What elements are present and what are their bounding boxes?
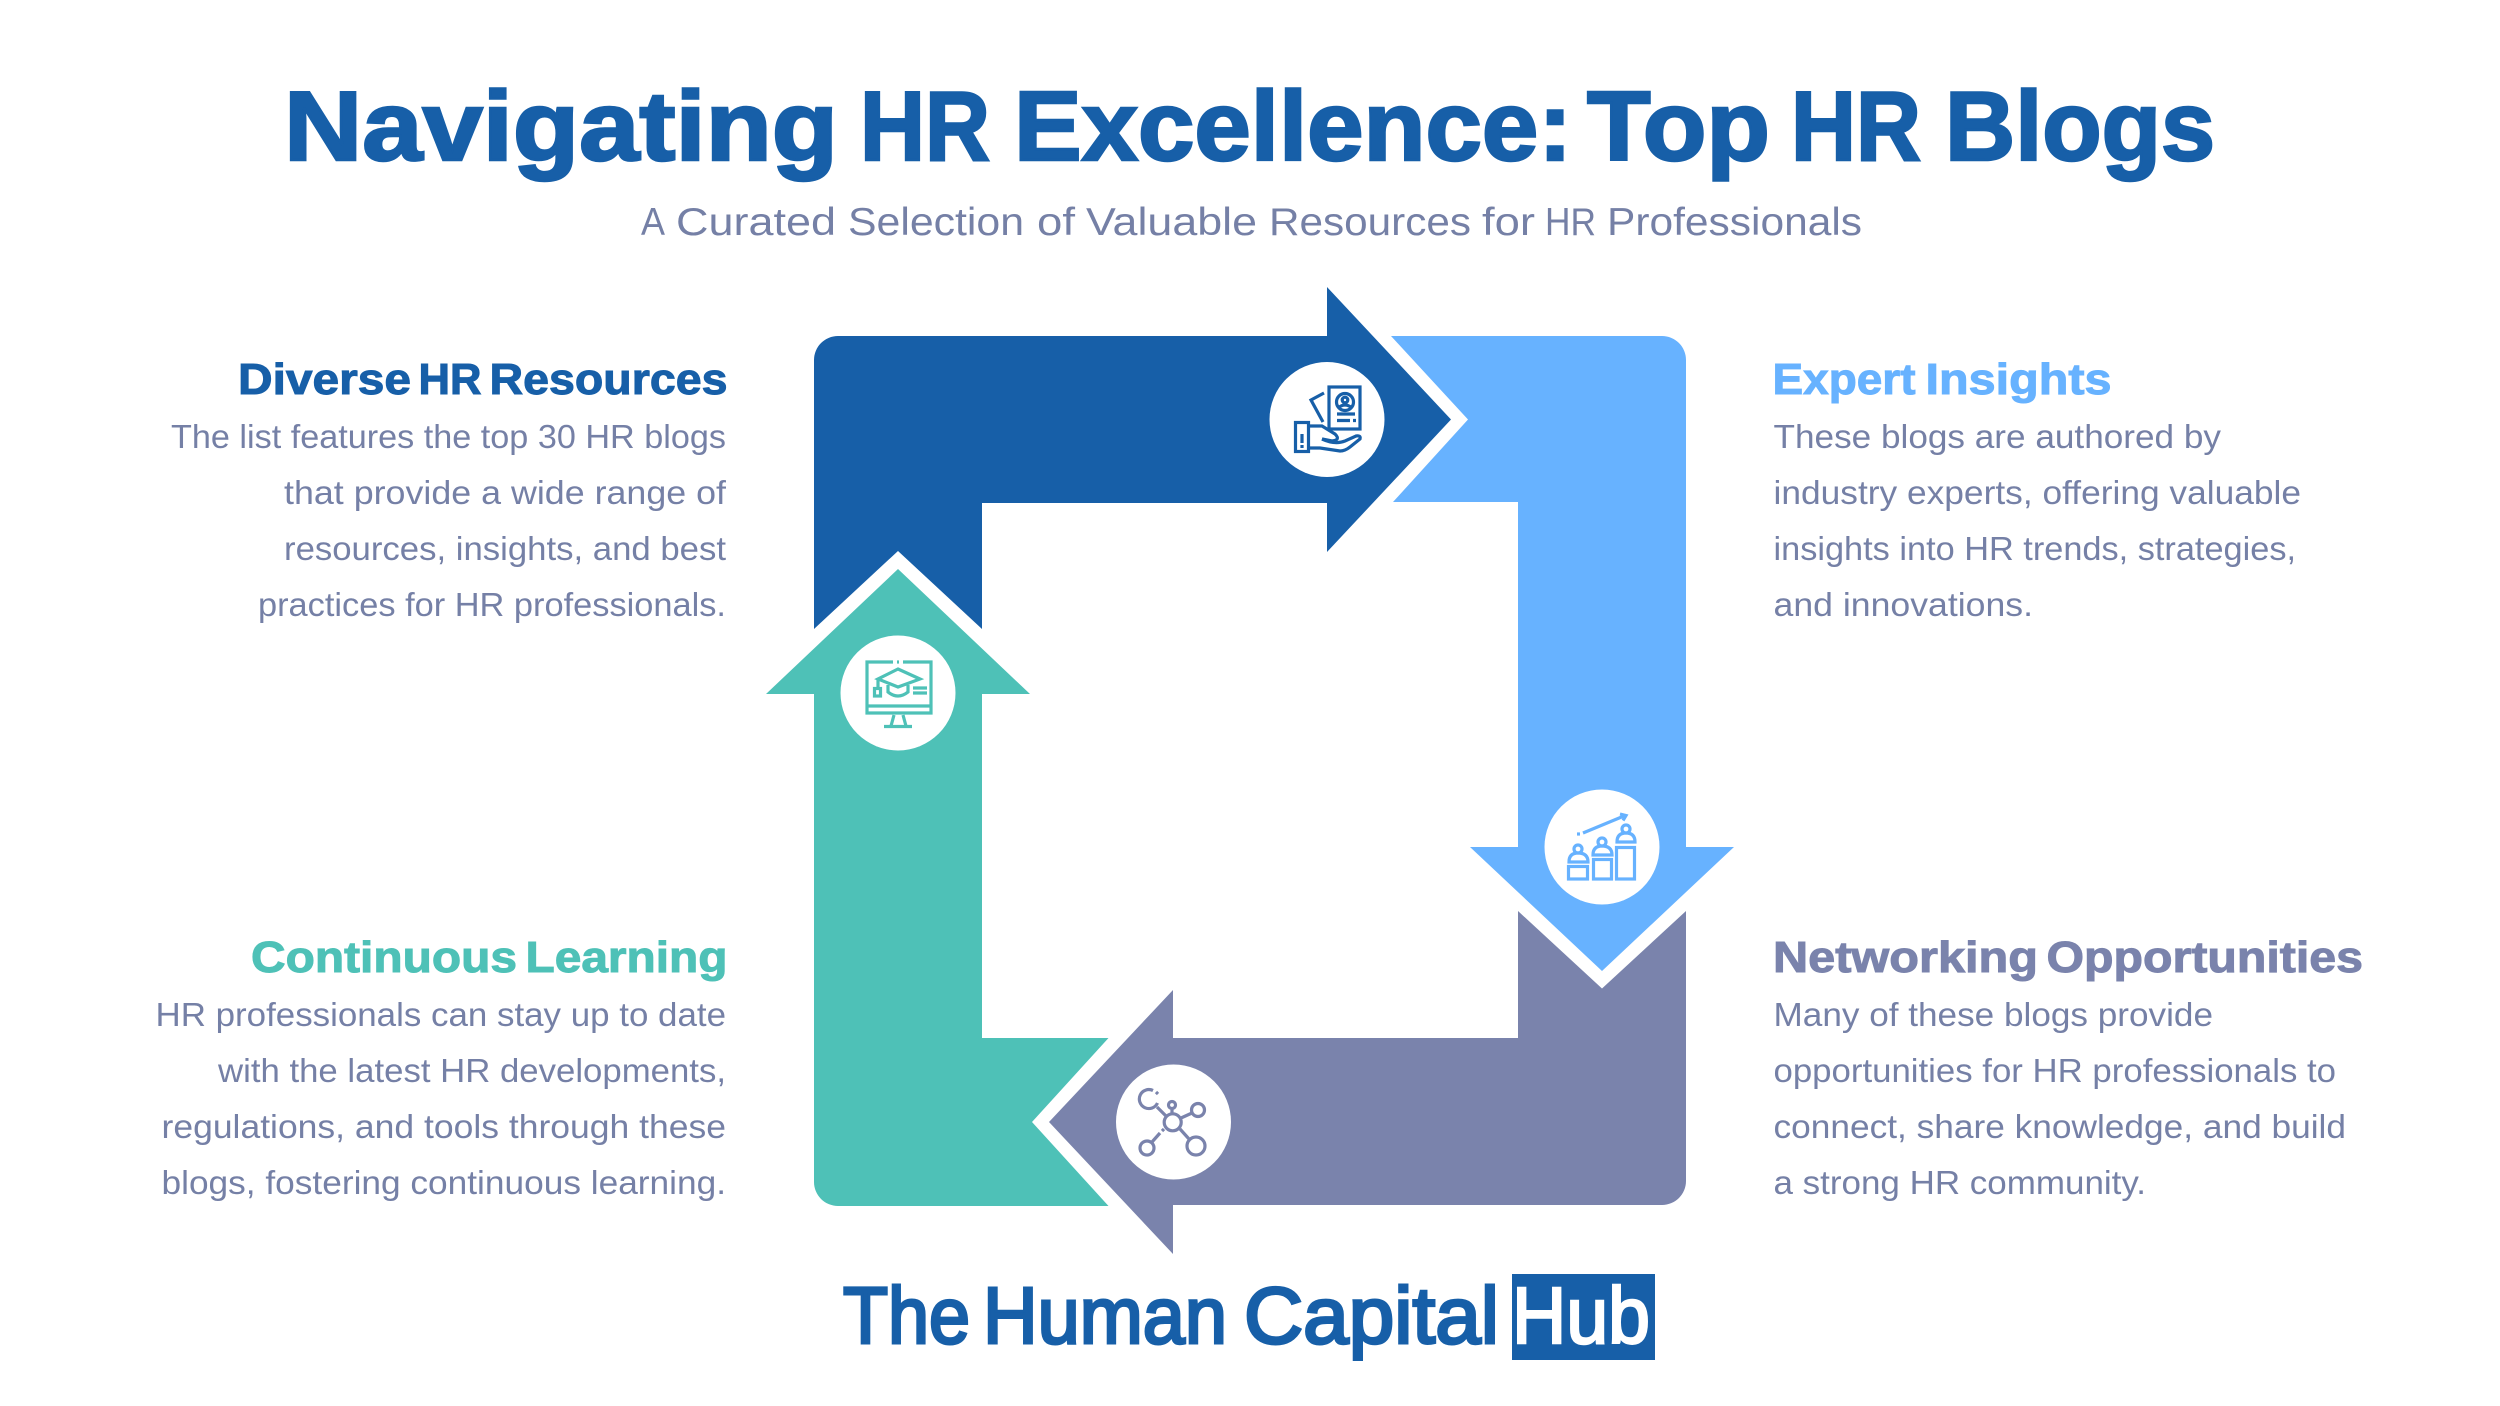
arrow: purple bottom [1049, 911, 1686, 1254]
subtitle: Selection [848, 201, 1024, 244]
text block: networking opportunities: Many of these blogs provide [1774, 997, 2213, 1034]
subtitle: Resources [1269, 201, 1471, 244]
title: Excellence: [1014, 71, 1572, 181]
heading: continuous learning: Learning [526, 933, 728, 982]
logo: The Human Capital Hub: Human [983, 1271, 1227, 1360]
panel: diverse HR resources [171, 355, 728, 624]
heading: continuous learning [251, 933, 728, 982]
icon: monitor with graduation cap [867, 662, 931, 726]
heading: expert insights [1772, 355, 2112, 404]
text block: expert insights [1774, 419, 2301, 624]
heading: diverse HR resources: Diverse [238, 355, 411, 404]
subtitle: Valuable [1086, 201, 1257, 244]
text block: diverse HR resources: practices for HR professionals. [258, 587, 726, 624]
text block: networking opportunities [1774, 997, 2346, 1202]
title [284, 71, 2215, 181]
subtitle: of [1037, 201, 1075, 244]
icon: hand holding profile card [1296, 387, 1360, 452]
heading: networking opportunities: Opportunities [2046, 933, 2363, 982]
arrow: teal left [766, 569, 1108, 1206]
logo: The Human Capital Hub: Hub [1512, 1271, 1650, 1360]
heading: continuous learning: Continuous [251, 933, 517, 982]
title: HR [1791, 71, 1921, 181]
text block: expert insights: insights into HR trends, strategies, [1774, 531, 2296, 568]
subtitle: A [641, 201, 665, 244]
text block: networking opportunities: opportunities for HR professionals to [1774, 1053, 2336, 1090]
text block: diverse HR resources: that provide a wide range of [284, 475, 727, 512]
text block: continuous learning [156, 997, 726, 1202]
logo: The Human Capital Hub: The [843, 1271, 970, 1360]
text block: continuous learning: regulations, and tools through these [162, 1109, 726, 1146]
heading: diverse HR resources [238, 355, 728, 404]
logo: The Human Capital Hub: Capital [1244, 1271, 1499, 1360]
heading: diverse HR resources: HR [418, 355, 482, 404]
text block: expert insights: and innovations. [1774, 587, 2033, 624]
heading: expert insights: Expert [1772, 355, 1916, 404]
subtitle [641, 201, 1862, 244]
text block: continuous learning: with the latest HR developments, [217, 1053, 726, 1090]
title: Blogs [1945, 71, 2215, 181]
subtitle: HR [1545, 201, 1596, 244]
text block: diverse HR resources: resources, insights, and best [284, 531, 727, 568]
arrow: dark blue top [814, 287, 1451, 629]
heading: diverse HR resources: Resources [490, 355, 728, 404]
subtitle: Curated [676, 201, 836, 244]
logo: The Human Capital Hub [843, 1271, 1655, 1360]
icon: people on rising bars [1568, 814, 1635, 879]
text block: diverse HR resources [171, 419, 727, 624]
text block: expert insights: industry experts, offering valuable [1774, 475, 2301, 512]
panel: continuous learning [156, 933, 728, 1202]
text block: networking opportunities: connect, share knowledge, and build [1774, 1109, 2346, 1146]
heading: networking opportunities [1773, 933, 2363, 982]
arrow: light blue right [1391, 336, 1734, 971]
text block: networking opportunities: a strong HR community. [1774, 1165, 2146, 1202]
panel: networking opportunities [1773, 933, 2363, 1202]
text block: continuous learning: blogs, fostering continuous learning. [162, 1165, 726, 1202]
heading: networking opportunities: Networking [1773, 933, 2038, 982]
title: Navigating [284, 71, 838, 181]
panel: expert insights [1772, 355, 2301, 624]
text block: continuous learning: HR professionals can stay up to date [156, 997, 726, 1034]
text block: expert insights: These blogs are authored by [1774, 419, 2221, 456]
title: Top [1587, 71, 1770, 181]
icon: network nodes [1139, 1090, 1205, 1155]
subtitle: Professionals [1607, 201, 1862, 244]
text block: diverse HR resources: The list features the top 30 HR blogs [171, 419, 726, 456]
heading: expert insights: Insights [1926, 355, 2112, 404]
subtitle: for [1482, 201, 1535, 244]
title: HR [860, 71, 990, 181]
